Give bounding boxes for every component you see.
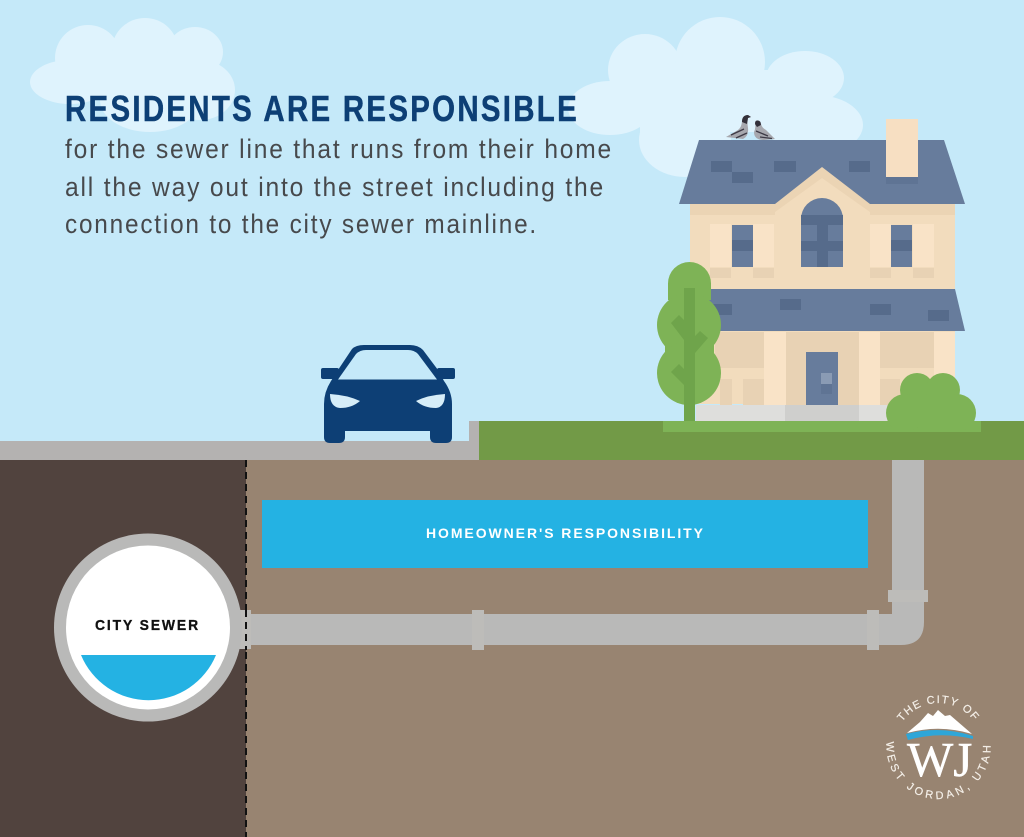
house [679, 119, 965, 421]
sewer water [81, 655, 216, 700]
lower roof [708, 289, 965, 331]
sills [710, 268, 934, 278]
logo: West Jordan: THE CITY OF [896, 695, 980, 720]
logo initials: WJ [907, 732, 972, 787]
body text: all the way out into the street including the [65, 172, 605, 202]
headlights [330, 394, 360, 408]
arched window [801, 198, 843, 267]
pigeons [726, 115, 775, 140]
cloud: right [568, 17, 863, 177]
porch panels [715, 332, 934, 405]
ground: city dark soil [0, 460, 246, 837]
title: RESIDENTS ARE RESPONSIBLE [65, 88, 579, 129]
door [806, 352, 838, 405]
city sewer pipe circle [54, 534, 242, 722]
roof shingles [711, 161, 870, 183]
horizontal collar near elbow [867, 610, 879, 650]
horizontal collar [472, 610, 484, 650]
body text [65, 134, 613, 239]
boundary dashes over pipe [245, 610, 247, 650]
body text: connection to the city sewer mainline. [65, 209, 538, 239]
gable [775, 167, 870, 215]
eave shadow [690, 204, 955, 215]
logo: West Jordan: WEST JORDAN, UTAH [886, 741, 991, 800]
road and curb [0, 421, 479, 460]
upper roof [679, 140, 965, 204]
side windows [732, 225, 753, 267]
homeowner banner: HOMEOWNER'S RESPONSIBILITY [426, 525, 704, 541]
bush [886, 373, 976, 432]
logo mountain [907, 710, 972, 734]
chimney [886, 119, 918, 177]
city sewer label: CITY SEWER [95, 617, 200, 634]
homeowner banner [262, 500, 868, 568]
upper shutters [710, 224, 934, 267]
lawn [479, 421, 1024, 460]
porch columns [764, 332, 786, 405]
steps [696, 405, 888, 421]
mirrors [321, 368, 339, 379]
car [321, 345, 455, 443]
vertical pipe collar [888, 590, 928, 602]
boundary dashed line [245, 460, 247, 837]
logo river [906, 730, 973, 740]
connection collar [238, 610, 251, 649]
tree [657, 262, 721, 421]
lawn strip [663, 421, 981, 432]
logo: West Jordan [886, 695, 991, 800]
body text: for the sewer line that runs from their home [65, 134, 613, 164]
windshield [338, 350, 437, 380]
ground: soil [246, 460, 1024, 837]
walls [690, 204, 955, 404]
cloud: left [30, 18, 235, 132]
sewer pipe [238, 460, 928, 650]
